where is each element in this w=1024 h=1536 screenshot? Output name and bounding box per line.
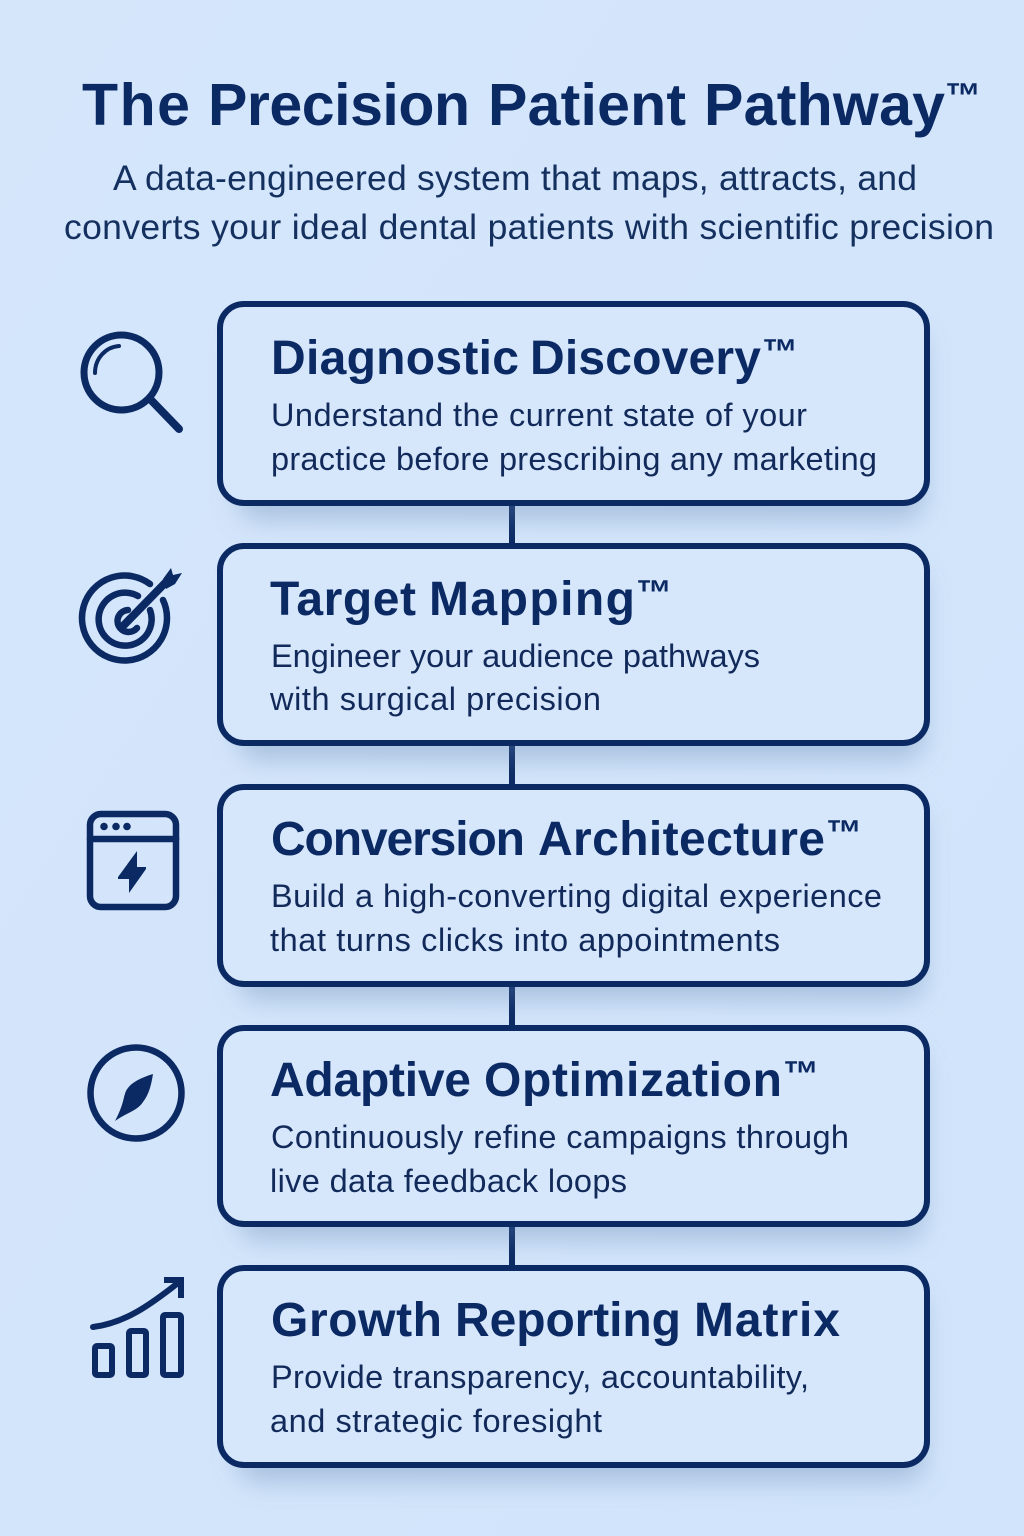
heading: Adaptive Optimization: Adaptive: [270, 1054, 471, 1107]
heading: Conversion Architecture: [271, 812, 862, 866]
icon: rising bar chart with arrow: [93, 1277, 184, 1375]
heading: Diagnostic Discovery: [271, 331, 798, 385]
heading: Conversion Architecture: ™: [826, 812, 862, 853]
icon: target with arrow: [82, 568, 182, 660]
heading: Target Mapping: Target: [270, 573, 416, 626]
connector lines between cards: [509, 504, 515, 1267]
heading: Growth Reporting Matrix: Reporting: [455, 1294, 681, 1347]
heading: Diagnostic Discovery: ™: [762, 331, 798, 372]
subtitle: [64, 158, 994, 247]
heading: Adaptive Optimization: ™: [783, 1053, 819, 1094]
heading: Growth Reporting Matrix: [271, 1294, 840, 1347]
panel: Adaptive Optimization: [220, 1028, 927, 1240]
description: Conversion Architecture: Build a high-converting digital experience: [271, 878, 882, 914]
heading: Growth Reporting Matrix: Matrix: [694, 1294, 840, 1347]
description: Growth Reporting Matrix: Provide transparency, accountability,: [271, 1359, 809, 1395]
panel: Diagnostic Discovery: [220, 304, 927, 520]
title: Pathway: [704, 72, 945, 138]
subtitle: converts your ideal dental patients with scientific precision: [64, 207, 994, 247]
heading: Diagnostic Discovery: Diagnostic: [271, 332, 519, 385]
icon: magnifying glass: [84, 335, 179, 429]
description: Target Mapping: [269, 638, 760, 717]
title: Precision: [208, 72, 470, 138]
description: Adaptive Optimization: [270, 1119, 849, 1199]
title: ™: [945, 75, 981, 116]
description: Growth Reporting Matrix: [270, 1359, 809, 1439]
icon: compass: [90, 1048, 182, 1138]
heading: Target Mapping: Mapping: [429, 573, 635, 626]
description: Growth Reporting Matrix: and strategic foresight: [270, 1403, 602, 1439]
panel: Growth Reporting Matrix: [220, 1268, 927, 1482]
description: Adaptive Optimization: Continuously refine campaigns through: [271, 1119, 849, 1155]
panel: Conversion Architecture: [220, 787, 927, 1000]
heading: Target Mapping: [270, 572, 672, 626]
heading: Growth Reporting Matrix: Growth: [271, 1294, 442, 1347]
heading: Conversion Architecture: Conversion: [271, 813, 525, 866]
description: Target Mapping: with surgical precision: [269, 681, 601, 717]
heading: Conversion Architecture: Architecture: [538, 813, 825, 866]
heading: Target Mapping: ™: [636, 572, 672, 613]
description: Target Mapping: Engineer your audience pathways: [271, 638, 760, 674]
heading: Adaptive Optimization: Optimization: [484, 1054, 782, 1107]
description: Diagnostic Discovery: practice before prescribing any marketing: [271, 441, 877, 477]
title: The: [82, 72, 190, 138]
description: Diagnostic Discovery: [271, 397, 877, 477]
panel: Target Mapping: [220, 546, 927, 760]
description: Conversion Architecture: [270, 878, 882, 958]
title: [82, 72, 981, 138]
icon: browser window with lightning bolt: [90, 814, 176, 907]
heading: Adaptive Optimization: [270, 1053, 819, 1107]
heading: Diagnostic Discovery: Discovery: [530, 332, 761, 385]
title: Patient: [488, 72, 686, 138]
description: Adaptive Optimization: live data feedback loops: [270, 1163, 627, 1199]
description: Conversion Architecture: that turns clicks into appointments: [270, 922, 780, 958]
subtitle: A data-engineered system that maps, attracts, and: [113, 158, 917, 198]
description: Diagnostic Discovery: Understand the current state of your: [271, 397, 807, 433]
